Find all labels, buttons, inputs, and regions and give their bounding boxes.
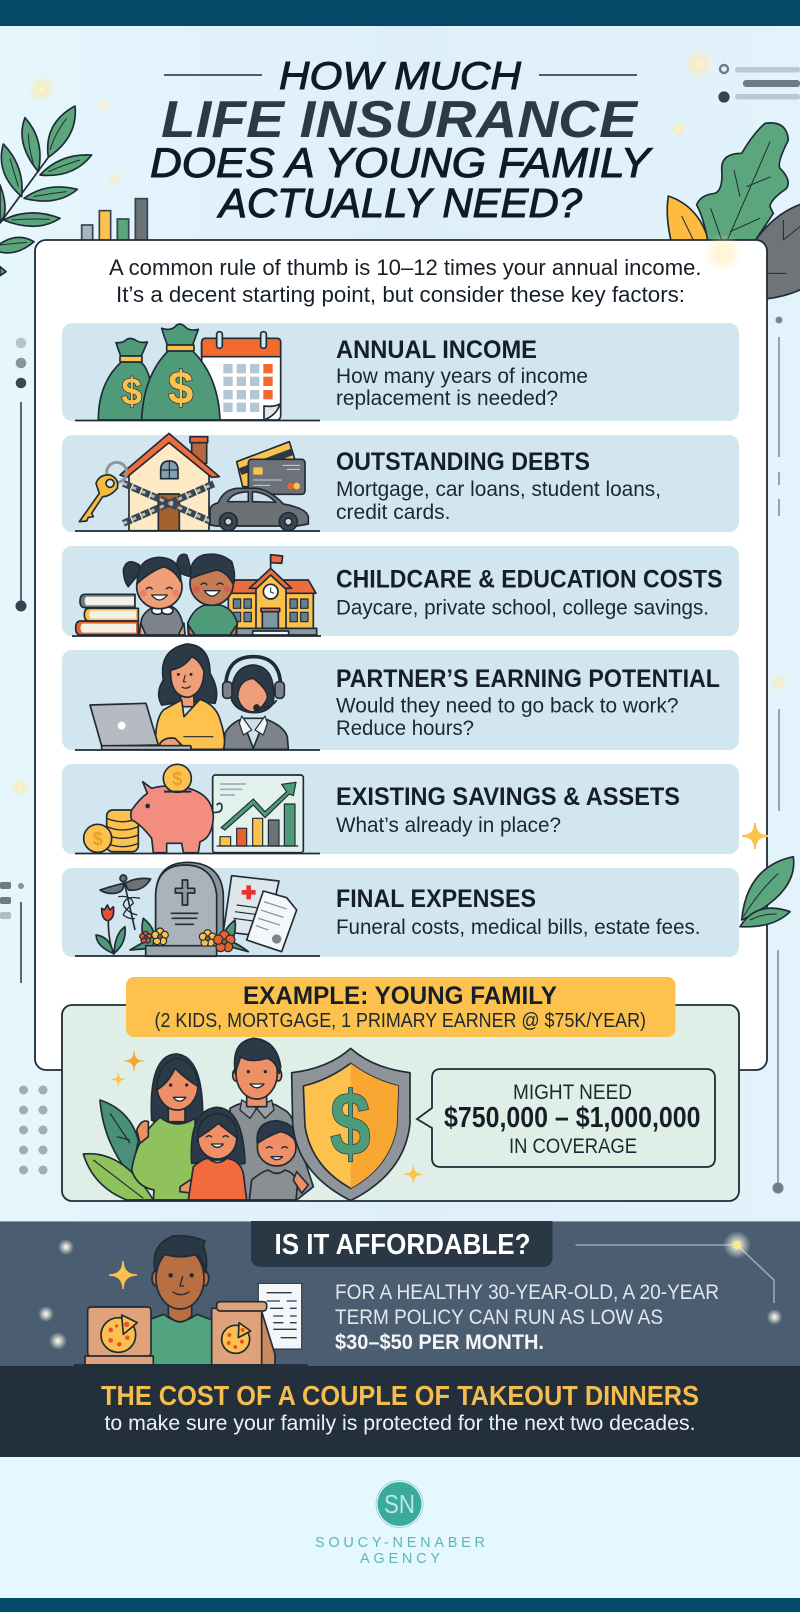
panel: takeout dinners: to make sure your family is protected for the next two decades. <box>104 1411 696 1435</box>
icon: money bags and calendar <box>98 324 281 420</box>
tab heading <box>251 1221 552 1267</box>
description: Mortgage, car loans, student loans, <box>336 477 661 501</box>
affordable text: FOR A HEALTHY 30-YEAR-OLD, A 20-YEAR <box>335 1280 719 1304</box>
heading: OUTSTANDING DEBTS <box>336 448 590 476</box>
illustration: family with shield: $ <box>330 1075 371 1175</box>
icon: piggy bank, coins and growth chart <box>84 764 303 853</box>
intro text: It’s a decent starting point, but consider these key factors: <box>116 282 685 307</box>
title: DOES A YOUNG FAMILY <box>150 139 653 186</box>
description: Daycare, private school, college savings. <box>336 596 709 620</box>
example tag: EXAMPLE: YOUNG FAMILY <box>243 982 557 1010</box>
example tag <box>126 977 676 1037</box>
icon: woman at laptop and headset worker <box>90 644 288 750</box>
title: ACTUALLY NEED? <box>216 180 582 226</box>
panel: partner's earning potential <box>62 644 739 750</box>
sparkle on card <box>703 233 743 273</box>
panel: existing savings and assets <box>62 764 739 854</box>
decoration: right sparkles and lines <box>670 49 800 1194</box>
panel: outstanding debts <box>62 433 739 532</box>
intro text <box>109 255 702 307</box>
icon: books, children and school <box>76 554 317 635</box>
icon: piggy bank, coins and growth chart: $ <box>92 828 103 849</box>
connector lines and lights <box>38 1231 782 1350</box>
footer background <box>0 1457 800 1598</box>
panel: annual income <box>62 323 739 421</box>
affordable text: TERM POLICY CAN RUN AS LOW AS <box>335 1305 663 1329</box>
icon: money bags and calendar: $ <box>168 361 193 413</box>
callout: coverage: $750,000 – $1,000,000 <box>444 1102 700 1134</box>
panel: takeout dinners: THE COST OF A COUPLE OF TAKEOUT DINNERS <box>101 1380 699 1411</box>
intro text: A common rule of thumb is 10–12 times your annual income. <box>109 255 702 280</box>
description: replacement is needed? <box>336 386 558 410</box>
title: LIFE INSURANCE <box>161 91 638 149</box>
icon: chained house, key, cards and car <box>79 433 308 531</box>
tab heading: IS IT AFFORDABLE? <box>274 1229 530 1261</box>
icon: headstone, caduceus, flowers and bills <box>96 862 297 956</box>
panel: white card <box>35 240 767 1070</box>
description <box>336 364 588 410</box>
title: HOW MUCH <box>279 55 522 98</box>
logo <box>315 1480 485 1567</box>
description: credit cards. <box>336 500 450 524</box>
heading: ANNUAL INCOME <box>336 336 537 364</box>
callout: coverage <box>417 1069 715 1167</box>
illustration: man with takeout <box>85 1236 302 1365</box>
affordable text: $30–$50 PER MONTH. <box>335 1330 544 1354</box>
panel: is it affordable <box>0 1221 800 1366</box>
description: What’s already in place? <box>336 813 561 837</box>
affordable text <box>335 1280 719 1354</box>
bottom bar <box>0 1598 800 1612</box>
heading: CHILDCARE & EDUCATION COSTS <box>336 566 722 594</box>
callout: coverage: MIGHT NEED <box>513 1080 632 1104</box>
heading: EXISTING SAVINGS & ASSETS <box>336 783 680 811</box>
icon: money bags and calendar: $ <box>121 371 142 414</box>
example tag: (2 KIDS, MORTGAGE, 1 PRIMARY EARNER @ $75K/YEAR) <box>154 1009 646 1032</box>
description: Funeral costs, medical bills, estate fees. <box>336 915 700 939</box>
illustration: family with shield <box>83 1038 422 1201</box>
panel: takeout dinners <box>0 1366 800 1457</box>
description: How many years of income <box>336 364 588 388</box>
heading: FINAL EXPENSES <box>336 885 536 913</box>
callout: coverage: IN COVERAGE <box>509 1134 637 1158</box>
logo: SN <box>384 1489 415 1519</box>
description <box>336 694 679 740</box>
logo: AGENCY <box>360 1551 440 1567</box>
icon: sparkle star <box>742 823 768 849</box>
logo: SOUCY-NENABER <box>315 1535 485 1551</box>
description: Would they need to go back to work? <box>336 694 679 718</box>
panel: example <box>62 977 739 1201</box>
decoration: dot grid <box>19 1086 48 1174</box>
description: Reduce hours? <box>336 716 474 740</box>
icon: leaf branch <box>0 106 92 276</box>
decoration: left rail <box>0 338 26 983</box>
icon: leaves top right <box>667 123 800 299</box>
panel: final expenses <box>62 862 739 957</box>
icon: mini bar chart <box>82 199 147 242</box>
description <box>336 477 661 524</box>
title <box>150 55 653 226</box>
icon: piggy bank, coins and growth chart: $ <box>172 768 183 789</box>
top bar <box>0 0 800 26</box>
heading: PARTNER’S EARNING POTENTIAL <box>336 665 720 693</box>
icon: right edge leaf <box>740 857 794 927</box>
panel: childcare and education costs <box>62 546 739 636</box>
decoration: left sparkles <box>10 75 123 797</box>
